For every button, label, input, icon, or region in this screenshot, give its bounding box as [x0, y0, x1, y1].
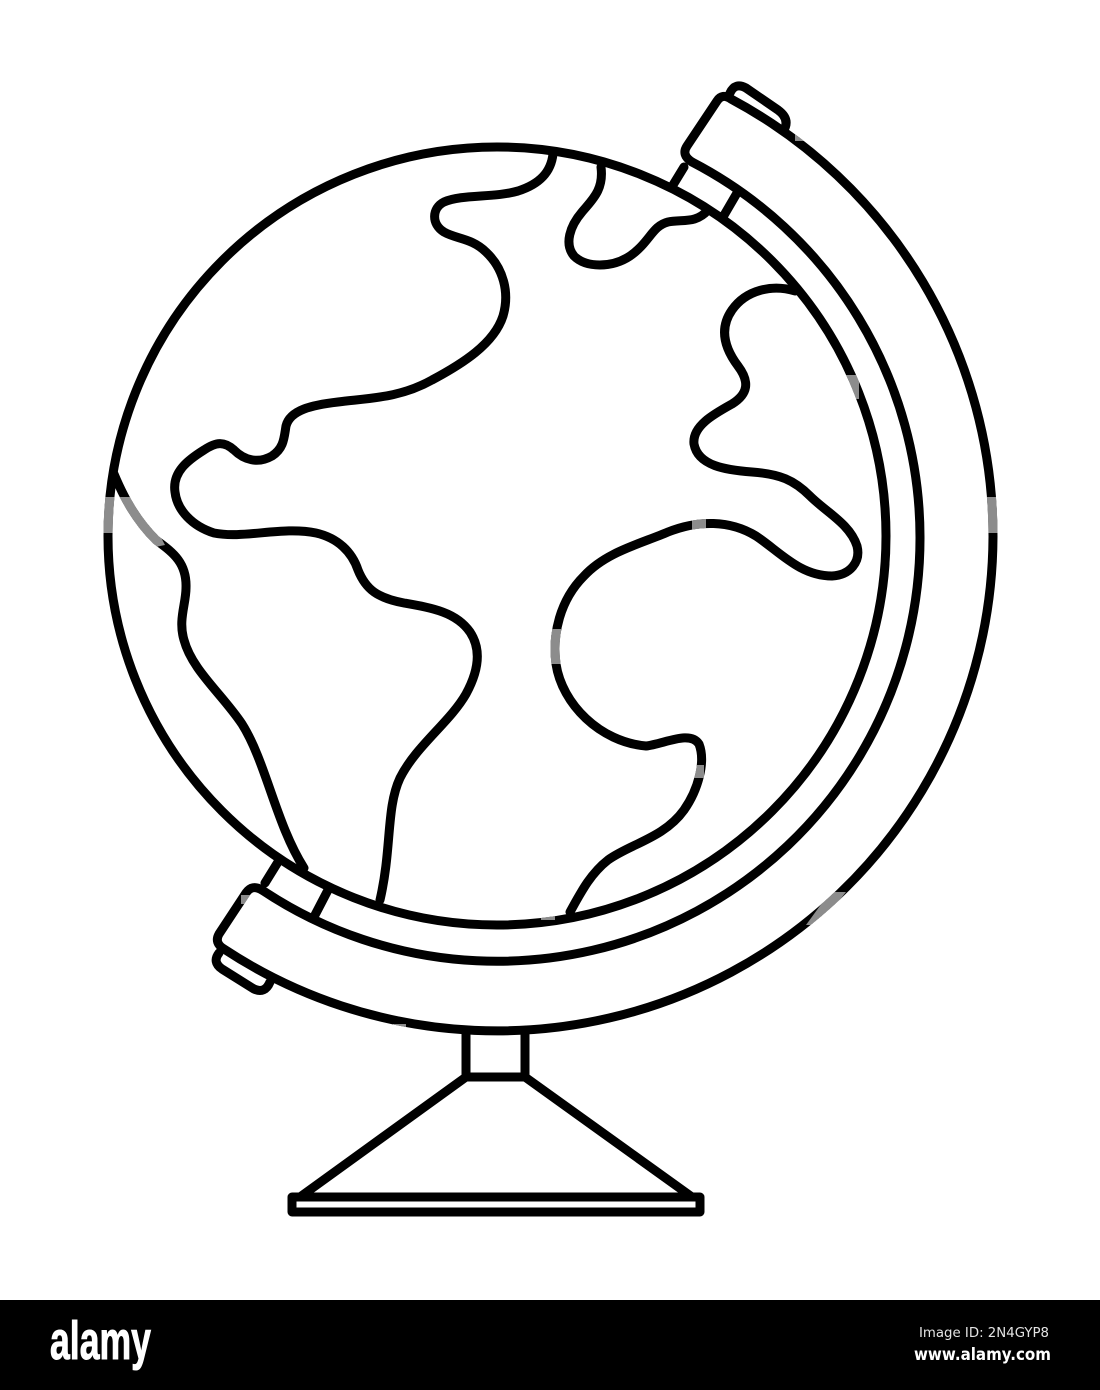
connector strips: bottom: [265, 862, 328, 915]
footer url: www.alamy.com: [914, 1345, 1051, 1365]
footer bar: [0, 1300, 1100, 1390]
clamp tab: bottom: [216, 953, 270, 990]
stand neck: [466, 1033, 525, 1077]
stand: outer arc with clamp edges: [217, 96, 993, 1031]
globe sphere outline: [108, 147, 886, 925]
continent: top peninsula: [569, 167, 708, 265]
footer logo: alamy: [50, 1311, 151, 1371]
stand base plate: [292, 1197, 700, 1212]
footer image id: Image ID: 2N4GYP8: [919, 1325, 1049, 1341]
watermark traces on lines: [101, 129, 1001, 1030]
stand base cone: [300, 1077, 692, 1197]
continent: left edge landmass: [114, 474, 304, 868]
clamp tab: top: [730, 86, 786, 128]
stand: inner arc: [262, 162, 920, 961]
connector strips: top: [673, 167, 737, 217]
continent: north and south landmass: [175, 154, 553, 900]
continent: right landmass: [555, 288, 858, 912]
globe with stand: [108, 86, 993, 1212]
